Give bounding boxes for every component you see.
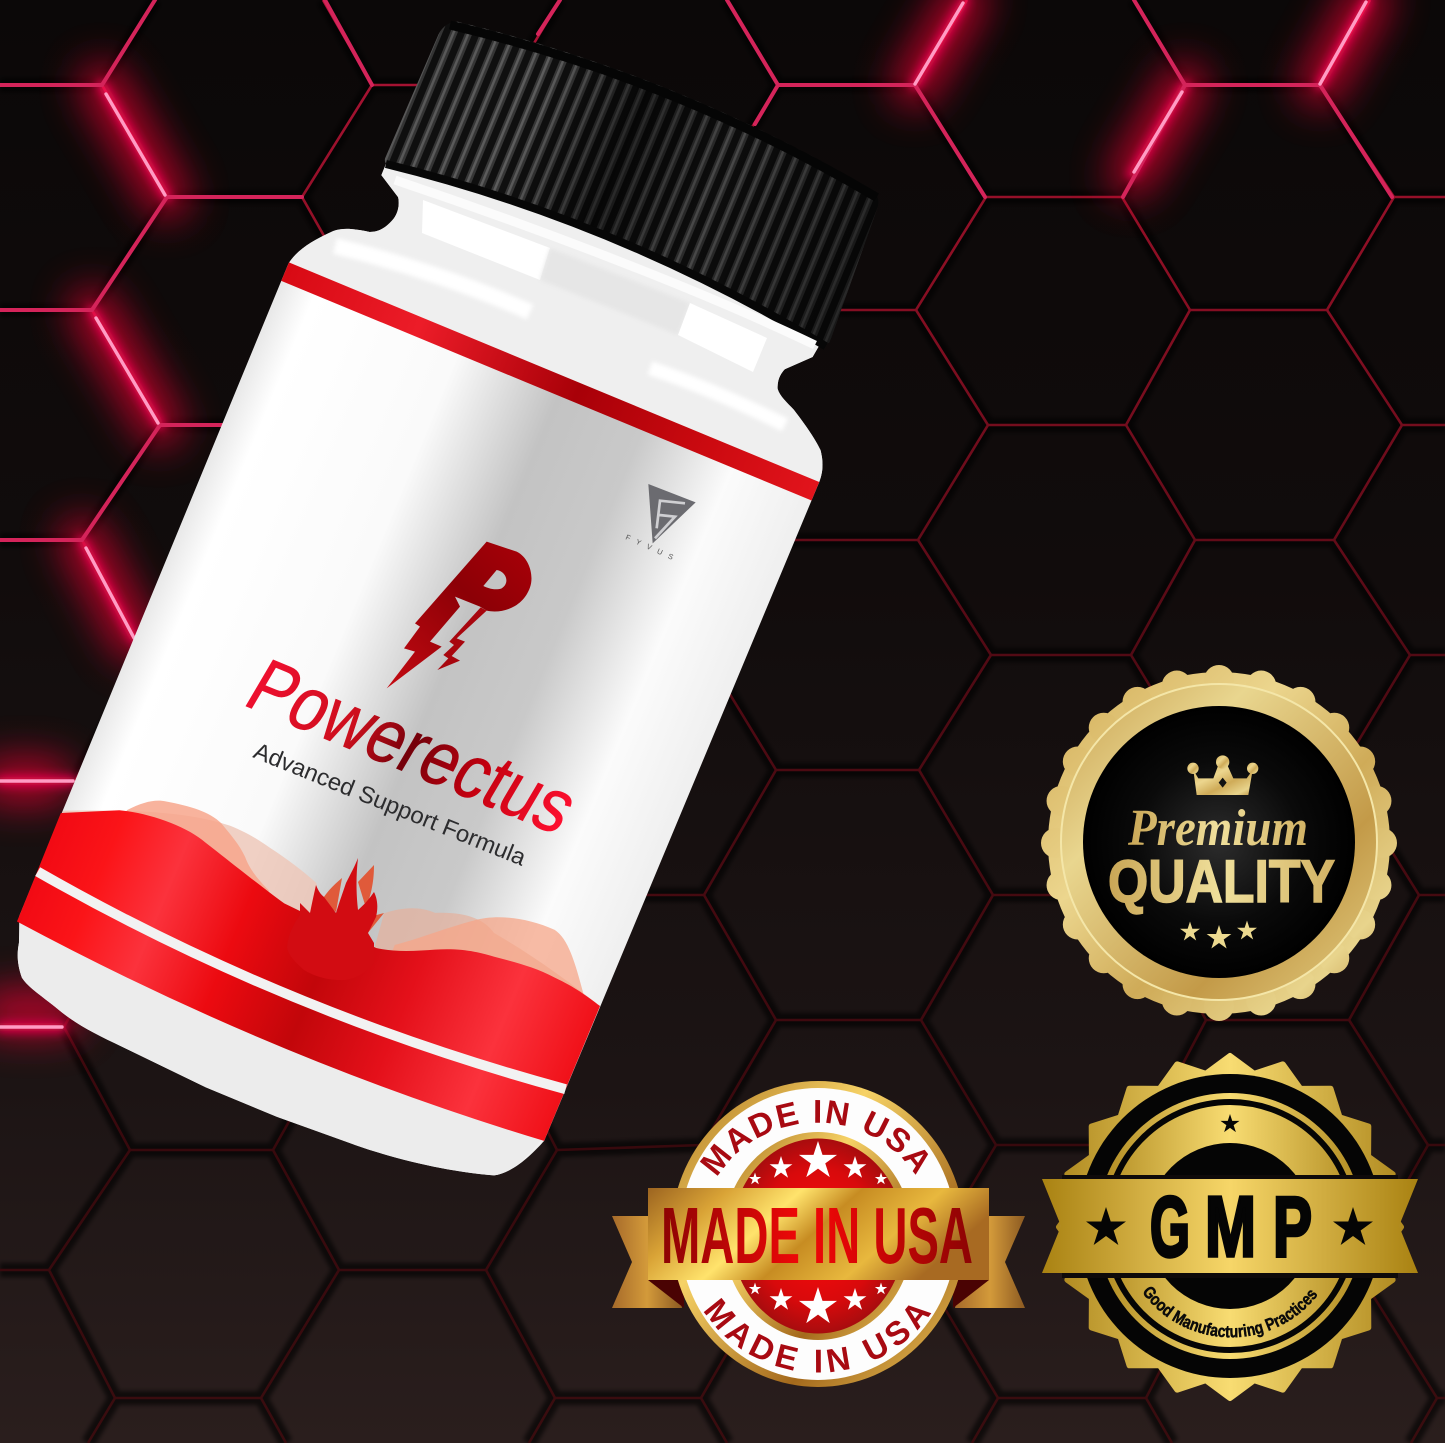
- FYVUS logo: [624, 484, 696, 564]
- icon: crown: [1187, 755, 1258, 795]
- neck reflections: [335, 180, 815, 425]
- bottle body: [0, 107, 884, 1216]
- flame graphic: [287, 858, 384, 980]
- FYVUS logo: FYVUS: [624, 533, 681, 564]
- bottle cap: [382, 0, 895, 349]
- top red label band: [281, 262, 819, 501]
- gmp text: M: [1205, 1180, 1256, 1275]
- brand name: Powerectus: [232, 644, 592, 850]
- ribbon tails: [612, 1216, 1025, 1308]
- curved caption: Good Manufacturing Practices: [1144, 1286, 1317, 1338]
- tagline: Advanced Support Formula: [250, 738, 531, 871]
- bottle neck and shoulder: [288, 107, 884, 484]
- gold ribbon: [648, 1188, 989, 1280]
- white stripe on label: [31, 871, 566, 1107]
- three stars: [1180, 920, 1257, 949]
- gmp text: [1150, 1180, 1312, 1275]
- premium script: Premium: [1127, 800, 1308, 857]
- scalloped gold edge: [1048, 672, 1390, 1014]
- white stars: [749, 1141, 887, 1323]
- curved top text: MADE IN USA: [700, 1100, 928, 1176]
- product bottle: [0, 0, 936, 1216]
- ribbon text: MADE IN USA: [661, 1191, 973, 1280]
- peach waves: [58, 738, 620, 1041]
- gmp text: P: [1273, 1180, 1312, 1275]
- lightning P logo: [387, 542, 531, 688]
- gmp text: G: [1150, 1180, 1190, 1275]
- gold ribbon: [1042, 1179, 1418, 1273]
- gaps around ribbon: [1062, 1175, 1398, 1278]
- ribbon stars: [1086, 1207, 1373, 1245]
- red label wave: [10, 778, 604, 1154]
- scalloped gold seal: [1059, 1056, 1401, 1398]
- quality: QUALITY: [1108, 848, 1335, 915]
- bottle base below label: [0, 911, 549, 1215]
- badge: made in usa: [612, 1081, 1025, 1387]
- badge: premium quality: [1048, 672, 1390, 1014]
- top star: [1220, 1114, 1240, 1132]
- curved bottom text: MADE IN USA: [704, 1298, 932, 1372]
- badge: gmp: [1042, 1052, 1418, 1402]
